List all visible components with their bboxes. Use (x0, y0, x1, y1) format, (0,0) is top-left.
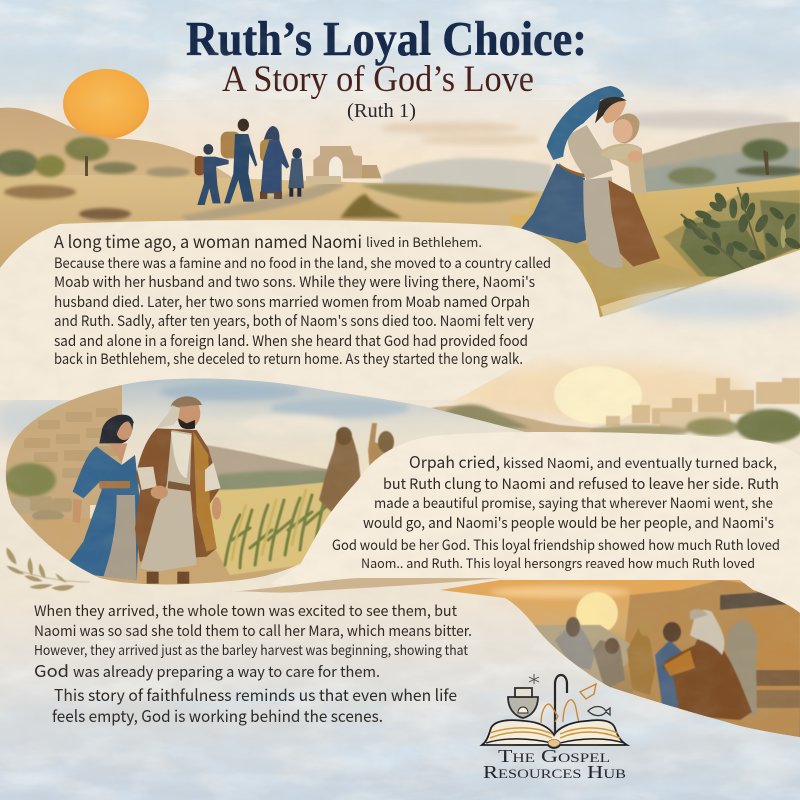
scene: family leaving and Naomi embracing (0, 69, 800, 330)
icon: olive sprig (7, 548, 90, 590)
hills: left range (0, 108, 232, 178)
boy (195, 156, 205, 175)
icon: ark (508, 688, 538, 718)
text: promise paragraph (332, 449, 780, 572)
icon: dove (580, 684, 596, 699)
woman (263, 126, 279, 142)
panel: promise text (270, 432, 800, 615)
trees: olive grove (590, 409, 800, 443)
logo: The Gospel Resources Hub (482, 674, 627, 782)
text: intro paragraph: lived in Bethlehem. (366, 232, 482, 251)
sun: pale sun (554, 366, 642, 424)
sun: setting orange sun (63, 69, 149, 139)
text: intro paragraph: back in Bethlehem, she deceled to return home. As they started the long walk. (54, 348, 523, 369)
icon: orange animals (541, 700, 579, 723)
title block (186, 11, 587, 122)
figure: elder in brown robe (662, 609, 752, 720)
hills: distant ridge (431, 406, 601, 432)
text: closing message: This story of faithfulness reminds us that even when life (54, 682, 457, 706)
text: closing message (52, 682, 457, 727)
text: promise paragraph: made a beautiful promise, saying that wherever Naomi went, she (374, 493, 773, 513)
text: intro paragraph (54, 228, 551, 369)
scene: village on the hill with pale sun (430, 364, 800, 443)
foreground: wheat, flowers and dirt track by the figures (510, 187, 800, 317)
heading: scripture reference: (Ruth 1) (347, 100, 416, 122)
text: promise paragraph: Naom.. and Ruth. This loyal hersongrs reaved how much Ruth loved (361, 553, 755, 572)
text: logo wordmark: The Gospel (498, 746, 610, 766)
field: golden wheat on the right (530, 175, 800, 325)
text: closing message: feels empty, God is working behind the scenes. (52, 703, 383, 727)
text: intro paragraph: A long time ago, a woman named Naomi (54, 228, 362, 253)
text: promise paragraph: Orpah cried, (409, 449, 500, 473)
heading: main title: Ruth’s Loyal Choice: (186, 11, 587, 66)
text: arrival paragraph: However, they arrived just as the barley harvest was beginning, showing that (34, 639, 468, 659)
ground: sunlit path (30, 518, 301, 584)
icon: fish (588, 706, 610, 716)
hills: mid-distance ridge (206, 444, 328, 490)
icon: open book (482, 720, 627, 748)
heading: subtitle: A Story of God’s Love (222, 59, 534, 100)
scene: Ruth and Naomi walking on the road (6, 378, 526, 584)
text: arrival paragraph: When they arrived, the whole town was excited to see them, but (34, 600, 458, 621)
text: arrival paragraph (34, 600, 472, 682)
ground: dusty path and slopes (0, 175, 544, 268)
sun: glowing sunset (576, 592, 618, 634)
icon: shepherd's crook (555, 675, 567, 733)
figure: Ruth in blue dress (70, 414, 140, 580)
figures: family of four walking (195, 119, 304, 205)
icon: sparkle (529, 674, 539, 684)
decoration: tan swoosh under promise panel (228, 578, 500, 593)
text: promise paragraph: but Ruth clung to Naomi and refused to leave her side. Ruth (383, 473, 779, 494)
figures: Orpah waving in the distance (318, 422, 395, 512)
text: arrival paragraph: God (34, 658, 69, 682)
buildings: town walls (530, 580, 800, 740)
text: arrival paragraph: Naomi was so sad she told them to call her Mara, which means bitter. (34, 620, 472, 641)
village: stacked houses (606, 378, 800, 430)
text: intro paragraph: husband died. Later, her two sons married women from Moab named Orpah (54, 291, 530, 312)
trees and shrubs (0, 137, 800, 220)
text: promise paragraph: would go, and Naomi's people would be her people, and Naomi's (363, 512, 774, 533)
arch: town gate (306, 146, 382, 184)
text: logo wordmark: Resources Hub (483, 762, 626, 782)
child (292, 148, 302, 159)
green leafy plant (663, 190, 800, 277)
text: intro paragraph: sad and alone in a foreign land. When she heard that God had provided food (54, 330, 528, 351)
figure: man in brown cloak (135, 396, 221, 584)
field: golden crop (210, 482, 332, 575)
text: logo wordmark (483, 746, 626, 782)
text: promise paragraph: kissed Naomi, and eventually turned back, (503, 452, 777, 472)
scene: arrival in Bethlehem at sunset (440, 575, 800, 745)
wall: stone wall (0, 385, 122, 545)
text: intro paragraph: Moab with her husband and two sons. While they were living there, Naomi's (54, 271, 535, 292)
figures: Naomi embracing Ruth (520, 86, 660, 268)
text: arrival paragraph: was already preparing a way to care for them. (73, 661, 380, 682)
figures: townspeople greeting Naomi (555, 617, 758, 715)
man (238, 119, 249, 131)
shrubs and rocks at wall base (4, 463, 72, 522)
text: intro paragraph: Because there was a famine and no food in the land, she moved to a country called (54, 253, 551, 273)
panel: intro story text (0, 220, 800, 400)
hills: right range (642, 122, 800, 192)
text: intro paragraph: and Ruth. Sadly, after ten years, both of Naom's sons died too. Naomi felt very (54, 310, 534, 331)
